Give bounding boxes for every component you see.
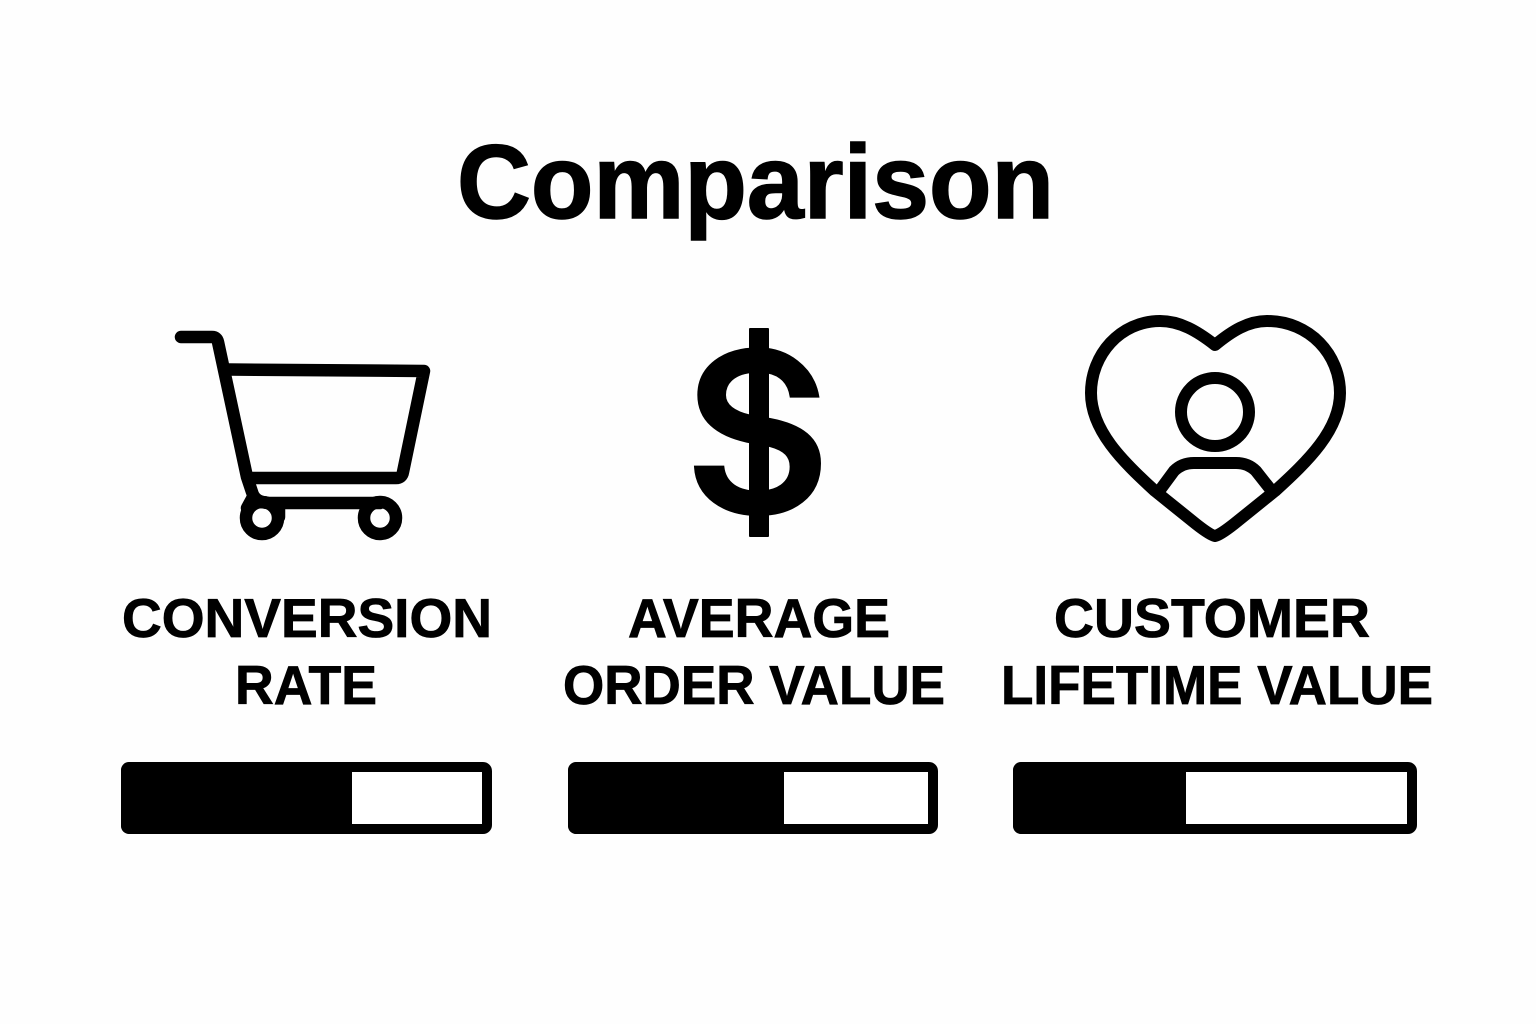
icon: heart with person <box>1091 321 1340 536</box>
panel: customer lifetime value <box>1001 321 1433 834</box>
label: conversion rate: RATE <box>235 654 377 716</box>
label: customer lifetime value: LIFETIME VALUE <box>1001 654 1433 716</box>
label: customer lifetime value: CUSTOMER <box>1054 587 1370 649</box>
progress bar: conversion rate <box>121 762 487 834</box>
progress bar: average order value <box>568 762 933 834</box>
panel: average order value <box>563 328 945 834</box>
title: Comparison <box>457 124 1054 241</box>
label: average order value: AVERAGE <box>628 587 890 649</box>
label: conversion rate: CONVERSION <box>122 587 492 649</box>
icon: dollar sign <box>695 328 820 537</box>
progress bar: customer lifetime value <box>1013 762 1412 834</box>
icon: shopping cart <box>181 337 424 534</box>
label: average order value: ORDER VALUE <box>563 654 945 716</box>
panel: conversion rate <box>121 337 492 834</box>
